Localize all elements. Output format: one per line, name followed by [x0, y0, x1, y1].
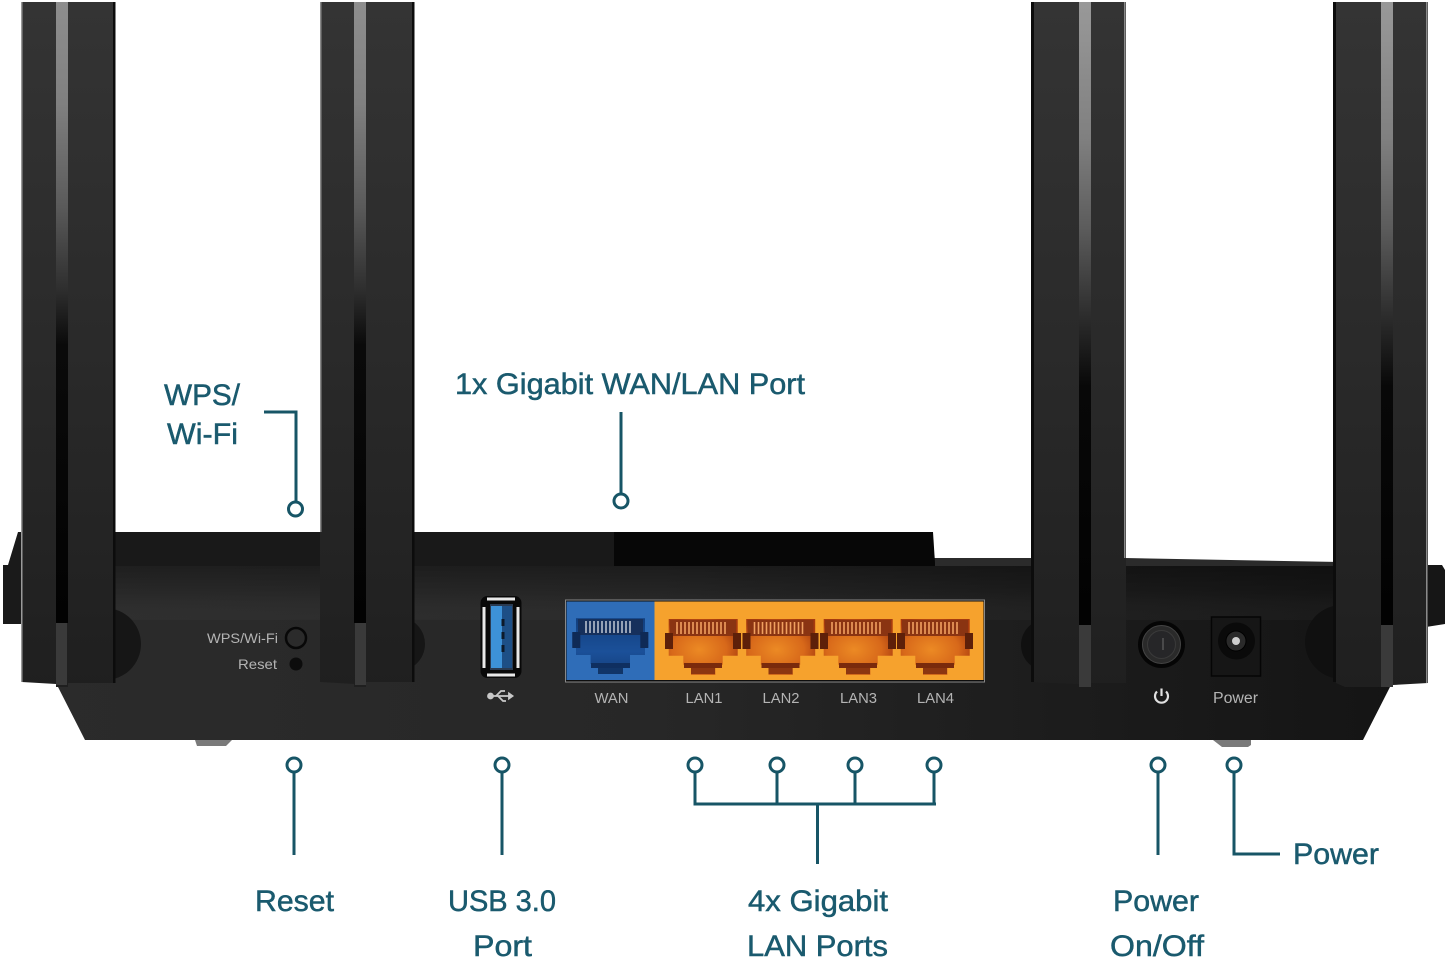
WAN panel: [566, 602, 654, 680]
LAN2 text: LAN2: [762, 691, 800, 707]
router body: [3, 532, 1445, 747]
port labels on device: [594, 691, 954, 707]
callout: 1x Gigabit WAN/LAN Port: [455, 368, 806, 508]
callout: 4x Gigabit LAN Ports: [688, 758, 941, 963]
LAN4 port: [897, 619, 973, 675]
callout: Reset: [255, 758, 335, 918]
icon: USB symbol: [488, 691, 512, 701]
device label Power: Power: [1213, 690, 1258, 707]
front face: [40, 566, 1410, 740]
panel outline: [566, 600, 984, 682]
LAN2 port: [742, 619, 818, 675]
antenna 3: [1031, 2, 1126, 687]
callout: 4x Gigabit LAN Ports: LAN Ports: [747, 930, 888, 963]
callout: WPS/Wi-Fi: WPS/: [164, 379, 241, 412]
antenna base circle 2: [371, 617, 425, 671]
WAN port: [572, 618, 648, 674]
callout: Power: [1227, 758, 1379, 871]
LAN1 port: [665, 619, 741, 675]
antenna base circle 4: [1305, 605, 1379, 679]
reset pinhole: [290, 658, 302, 670]
callout: Power On/Off: On/Off: [1110, 930, 1205, 963]
device label Reset: Reset: [238, 656, 277, 672]
USB 3.0 port: [480, 596, 522, 678]
callout: USB 3.0 Port: Port: [473, 930, 533, 963]
LAN panel: [654, 602, 984, 680]
power button: [1138, 621, 1185, 668]
right side ear: [1426, 565, 1445, 627]
foot right: [1213, 740, 1251, 747]
callout: Power: Power: [1293, 838, 1379, 871]
LAN3 port: [820, 619, 896, 675]
rear top shell left: [100, 532, 620, 568]
antenna 2: [320, 2, 414, 687]
left side ear: [3, 532, 24, 624]
callout: Power On/Off: Power: [1113, 885, 1199, 918]
antenna 1: [21, 2, 116, 687]
callout: WPS/Wi-Fi: Wi-Fi: [167, 418, 238, 451]
rear top edge right: [930, 558, 1340, 580]
callout: Power On/Off: [1110, 758, 1205, 963]
LAN1 text: LAN1: [686, 691, 722, 707]
WPS button: [286, 628, 306, 648]
WAN text: WAN: [594, 691, 628, 707]
callout: USB 3.0 Port: [448, 758, 556, 963]
Ethernet port panel: [566, 600, 984, 682]
front top shading: [115, 566, 1340, 620]
callout: USB 3.0 Port: USB 3.0: [448, 885, 556, 918]
rear top shell raised black section: [614, 532, 935, 568]
device label WPS/Wi-Fi: WPS/Wi-Fi: [207, 630, 278, 646]
LAN4 text: LAN4: [917, 691, 954, 707]
antenna base circle 1: [69, 608, 141, 680]
power jack: [1212, 617, 1260, 676]
callout: Reset: Reset: [255, 885, 335, 918]
foot left: [195, 740, 232, 746]
antenna base circle 3: [1021, 619, 1073, 671]
callout: 4x Gigabit LAN Ports: 4x Gigabit: [748, 885, 889, 918]
WPS and reset controls: [207, 628, 306, 672]
callout: 1x Gigabit WAN/LAN Port: 1x Gigabit WAN/LAN Port: [455, 368, 806, 401]
callout: WPS/Wi-Fi: [164, 379, 302, 516]
icon: power symbol: [1155, 688, 1168, 703]
antenna 4: [1333, 2, 1428, 687]
LAN3 text: LAN3: [840, 691, 877, 707]
